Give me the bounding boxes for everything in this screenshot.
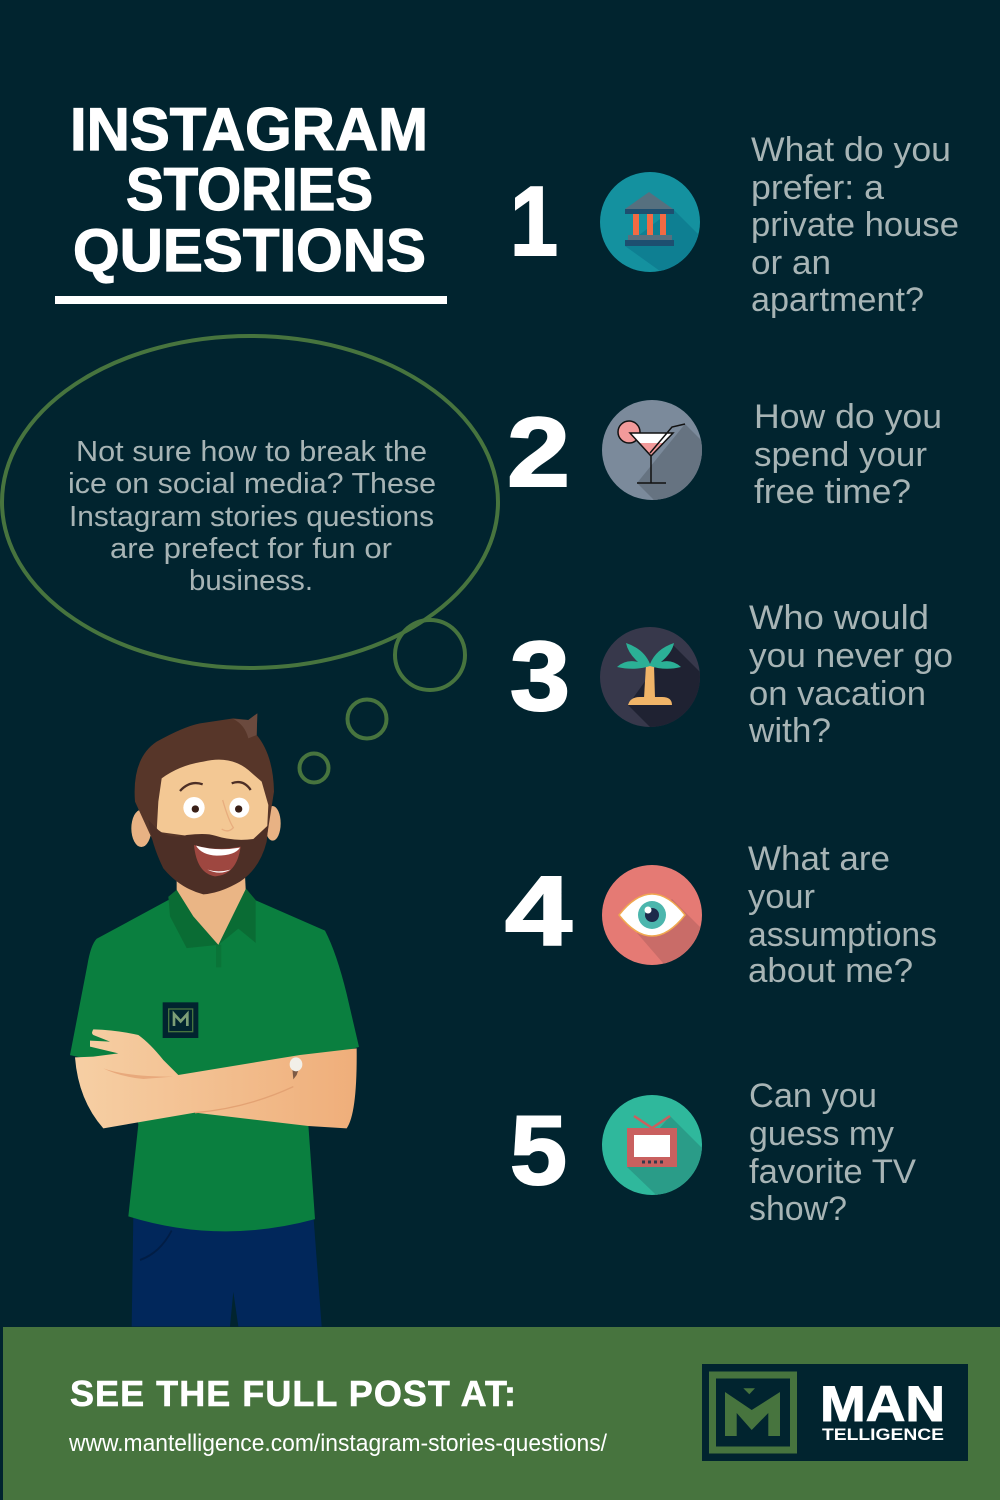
title (70, 96, 428, 284)
thought bubble (2, 336, 498, 782)
question 5 text: favorite TV (749, 1153, 916, 1191)
icon: eye (602, 865, 702, 965)
trousers (132, 1214, 322, 1327)
chest badge (163, 1002, 198, 1038)
number 3: 3 (510, 621, 570, 731)
collar (168, 889, 256, 948)
question 2 text: How do you (754, 398, 942, 436)
thought bubble text: Instagram stories questions (69, 501, 434, 533)
icon: cocktail glass (602, 400, 702, 500)
question 2 text: free time? (754, 473, 911, 511)
question 4 text (748, 840, 937, 990)
eyes (180, 782, 251, 818)
title: INSTAGRAM (70, 96, 428, 163)
cartoon man with crossed arms (70, 713, 359, 1327)
icon: television (602, 1095, 702, 1195)
icon: bank building (600, 172, 700, 272)
question 4 text: your (748, 878, 815, 916)
question 1 text: prefer: a (751, 169, 884, 207)
number 2: 2 (507, 397, 570, 507)
question 5 text: Can you (749, 1077, 877, 1115)
question 2 (510, 400, 940, 504)
question 3 text (748, 599, 953, 750)
thought bubble text: business. (189, 565, 313, 597)
question 1 text: private house (751, 206, 959, 244)
question 3 (510, 599, 953, 750)
number 1: 1 (510, 166, 558, 276)
thought bubble text: Not sure how to break the (76, 436, 427, 468)
question 1 (510, 131, 959, 319)
hair (135, 713, 274, 842)
question 4 text: assumptions (748, 916, 937, 954)
question 3 text: with? (748, 712, 831, 750)
head (131, 713, 281, 894)
thought bubble text: are prefect for fun or (110, 533, 392, 565)
question 1 text (751, 131, 959, 319)
beard (148, 820, 268, 894)
thought bubble text: ice on social media? These (68, 468, 436, 500)
title: STORIES (126, 156, 373, 223)
thought bubble text (68, 436, 436, 597)
trouser pocket (140, 1231, 172, 1260)
footer url: www.mantelligence.com/instagram-stories-questions/ (68, 1430, 607, 1457)
question 1 text: apartment? (751, 281, 924, 319)
question 5 text (749, 1077, 916, 1228)
footer heading: SEE THE FULL POST AT: (70, 1373, 516, 1414)
crossed arms (75, 1002, 357, 1128)
question 2 text (754, 398, 942, 511)
question 4 text: What are (748, 840, 890, 878)
number 5: 5 (510, 1095, 567, 1205)
logo: MAN (820, 1376, 945, 1432)
question 3 text: Who would (749, 599, 929, 637)
icon: palm tree (600, 627, 700, 727)
number 4: 4 (505, 856, 572, 966)
question 1 text: What do you (751, 131, 951, 169)
footer band (3, 1327, 1000, 1500)
face (157, 760, 268, 842)
mouth (194, 845, 241, 876)
lower body and shirt (70, 876, 359, 1327)
question 3 text: you never go (749, 637, 953, 675)
logo: TELLIGENCE (822, 1425, 944, 1444)
question 5 text: guess my (749, 1115, 894, 1153)
logo (702, 1364, 968, 1461)
question 2 text: spend your (754, 436, 927, 474)
neck (177, 876, 247, 947)
title: QUESTIONS (73, 217, 426, 284)
question 3 text: on vacation (749, 675, 926, 713)
question 5 (510, 1077, 916, 1228)
question 4 (505, 840, 937, 990)
placket (216, 945, 221, 967)
shirt (70, 900, 359, 1231)
question 5 text: show? (749, 1190, 847, 1228)
title underline (55, 296, 447, 304)
question 1 text: or an (751, 244, 831, 282)
question 4 text: about me? (748, 952, 913, 990)
ears (131, 806, 281, 847)
nose (222, 800, 233, 831)
hair tuft (233, 713, 257, 738)
watch (290, 1057, 302, 1079)
